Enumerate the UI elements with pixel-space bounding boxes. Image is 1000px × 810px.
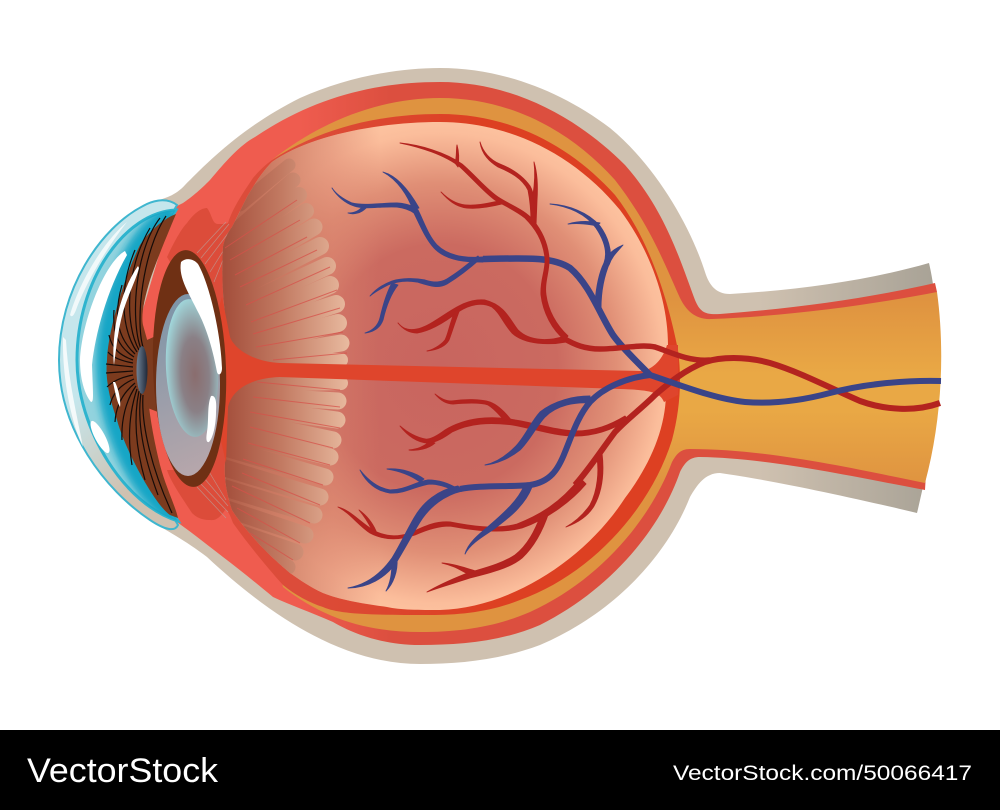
cornea highlights (80, 251, 127, 402)
iris highlights (113, 266, 139, 365)
sclera outer layer (59, 68, 938, 664)
zonule fibres (197, 222, 230, 518)
cornea (59, 200, 178, 529)
veins upper (blue) (332, 172, 650, 375)
iris radial lines (106, 216, 172, 513)
iris-to-lens brown bridge (145, 335, 158, 412)
image id text: VectorStock.com/50066417 (673, 762, 972, 785)
cornea inner band (77, 210, 178, 521)
upper ciliary folds (215, 165, 341, 360)
retina orange layer and optic nerve (240, 98, 941, 632)
iris (106, 214, 178, 518)
choroid red layer (125, 82, 937, 645)
lens body (156, 294, 220, 476)
lens nucleus (162, 298, 222, 438)
inner red lining and darker ciliary patch (167, 114, 680, 615)
logo text: VectorStock (27, 752, 219, 790)
pupil (136, 346, 148, 394)
cornea teal shading (107, 212, 178, 518)
lens capsule (149, 249, 230, 488)
lower ciliary folds (215, 383, 341, 567)
arteries (red) (338, 142, 940, 592)
lens highlights (181, 259, 222, 374)
footer bar (0, 730, 1000, 810)
fold fine lines (225, 200, 347, 560)
vitreous chamber (215, 115, 675, 615)
veins lower (blue) (348, 375, 941, 591)
central stripe and optic disc (212, 297, 678, 463)
